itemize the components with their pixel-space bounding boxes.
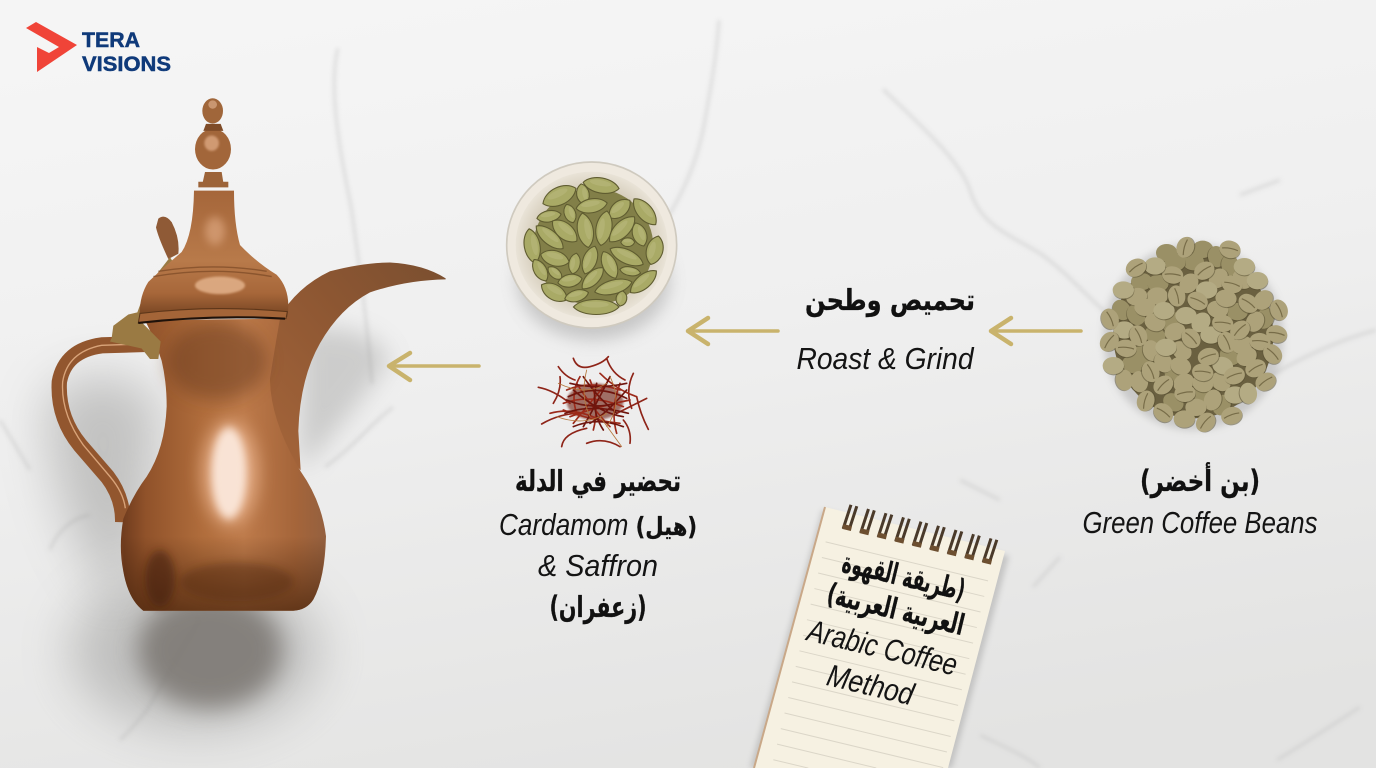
heading: prepare in dallah (499, 464, 697, 624)
label: roast and grind: Roast & Grind (796, 341, 975, 376)
logo (26, 22, 171, 76)
body (121, 319, 326, 611)
logo mark (26, 22, 77, 72)
label: roast and grind: تحميص وطحن (805, 283, 975, 317)
notebook title: العربية العربية) (824, 576, 968, 642)
saffron threads (538, 357, 648, 447)
label: green coffee beans: (بن أخضر) (1140, 462, 1260, 498)
label: cardamom and saffron: & Saffron (538, 548, 658, 583)
cardamom pods (521, 175, 666, 315)
logo wordmark (82, 28, 171, 76)
spout (269, 263, 446, 470)
ruled lines (773, 542, 988, 768)
notebook title (793, 540, 978, 720)
notebook title: Method (824, 658, 919, 712)
icon: copper dallah coffee pot (59, 98, 446, 611)
panel: spiral notebook (750, 501, 1009, 768)
heading: prepare in dallah: تحضير في الدلة (515, 464, 681, 498)
handle (59, 344, 147, 522)
label: green coffee beans: Green Coffee Beans (1082, 505, 1318, 540)
bowl (507, 162, 677, 328)
notebook title: Arabic Coffee (802, 612, 961, 682)
arrow: grind to spices (688, 318, 778, 344)
icon: green coffee beans (1096, 234, 1291, 437)
notebook title: (طريقة القهوة (839, 545, 969, 607)
lid (140, 191, 288, 319)
icon: cardamom bowl (507, 162, 677, 447)
logo wordmark: TERA (82, 28, 140, 52)
label: cardamom and saffron (499, 507, 697, 624)
body highlight (202, 420, 258, 526)
label: green coffee beans (1082, 462, 1318, 540)
finial (198, 172, 228, 187)
dallah shadow (45, 328, 390, 730)
arrow: beans to roast (991, 318, 1081, 344)
lid thumb lever (156, 217, 179, 259)
label: roast and grind (796, 283, 975, 376)
spiral binding (842, 504, 997, 564)
brass hinge (110, 257, 173, 359)
arrow: dallah (389, 353, 479, 380)
logo wordmark: VISIONS (82, 52, 171, 76)
label: cardamom and saffron: (زعفران) (550, 590, 646, 624)
label: cardamom and saffron: Cardamom (هيل) (499, 507, 697, 542)
